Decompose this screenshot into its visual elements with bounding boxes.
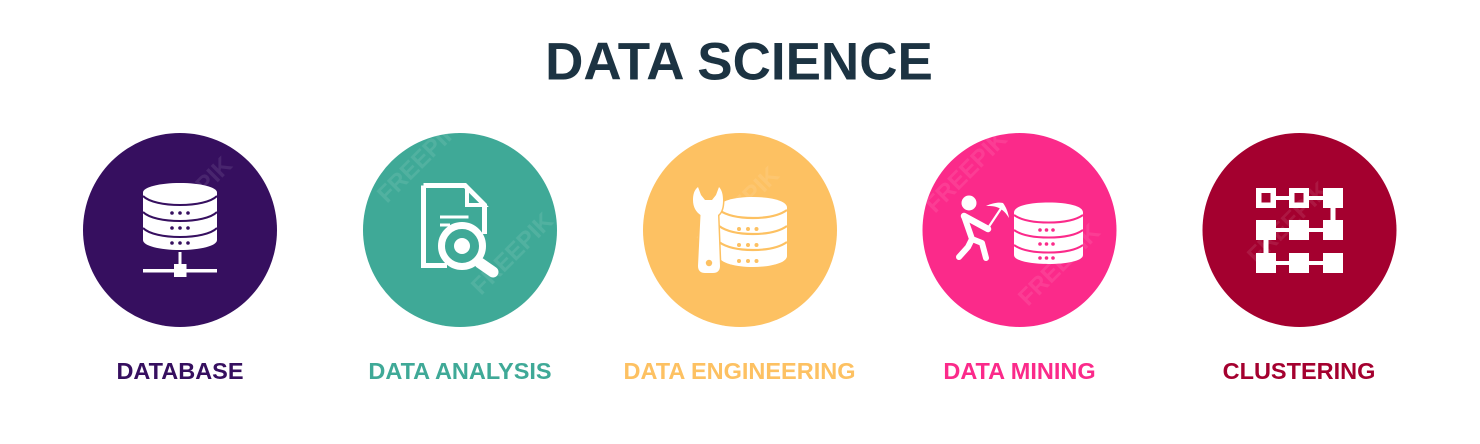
icon: miner and database <box>959 196 1083 264</box>
data mining circle <box>922 133 1116 327</box>
icon: document with magnifier <box>424 186 493 272</box>
icon: cluster blocks <box>1256 188 1343 273</box>
panel: clustering <box>1202 133 1396 384</box>
panel: data engineering <box>624 133 855 384</box>
watermark: FREEPIK <box>920 125 1013 218</box>
icon: networked database <box>143 183 217 277</box>
clustering circle <box>1202 133 1396 327</box>
title: DATA SCIENCE <box>545 32 933 92</box>
label: database: DATABASE <box>116 358 244 384</box>
watermark lower: FREEPIK <box>1013 218 1106 311</box>
panel: data analysis <box>363 115 559 384</box>
panel: database <box>83 133 277 384</box>
data engineering circle <box>643 133 837 327</box>
label: clustering: CLUSTERING <box>1223 358 1375 384</box>
watermark lower: FREEPIK <box>466 207 559 300</box>
watermark: FREEPIK <box>692 161 785 254</box>
label: data engineering: DATA ENGINEERING <box>624 358 855 384</box>
watermark: FREEPIK <box>372 115 465 208</box>
watermark: FREEPIK <box>1242 176 1335 269</box>
data analysis circle <box>363 133 557 327</box>
label: data mining: DATA MINING <box>943 358 1096 384</box>
watermark: FREEPIK <box>145 151 238 244</box>
icon: wrench and database <box>693 187 787 273</box>
panel: data mining <box>920 125 1116 384</box>
label: data analysis: DATA ANALYSIS <box>368 358 552 384</box>
database circle <box>83 133 277 327</box>
